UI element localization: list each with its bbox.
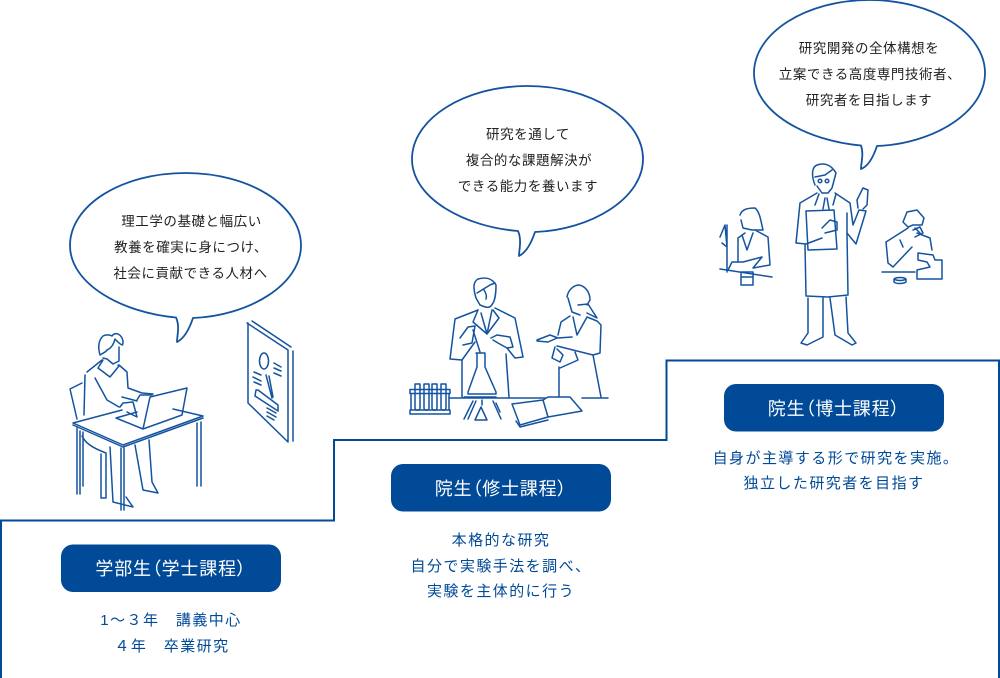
- description: doctoral: [713, 450, 959, 492]
- illustration: researcher at microscope: [882, 210, 942, 284]
- label: doctoral: [724, 384, 944, 432]
- speech bubble: undergraduate: 理工学の基礎と幅広い: [121, 213, 262, 229]
- speech bubble: doctoral: [754, 0, 985, 169]
- description: master's: 本格的な研究: [452, 532, 550, 549]
- illustration: head researcher with clipboard: [796, 164, 868, 345]
- label: master's: [391, 464, 611, 512]
- illustration: two researchers in lab: [449, 278, 608, 427]
- illustration: poster on wall: [247, 321, 293, 442]
- description: master's: 自分で実験手法を調べ、: [411, 558, 591, 575]
- illustration: test tube rack: [410, 384, 450, 414]
- speech bubble: master's: 複合的な課題解決が: [466, 152, 592, 168]
- staircase outline: [1, 360, 999, 678]
- speech bubble: master's: できる能力を養います: [458, 178, 598, 194]
- label: undergraduate: 学部生（学士課程）: [95, 559, 247, 579]
- label: undergraduate: [61, 544, 281, 592]
- speech bubble: doctoral: 立案できる高度専門技術者、: [779, 66, 961, 82]
- label: doctoral: 院生（博士課程）: [768, 399, 900, 419]
- speech bubble: master's: [412, 86, 643, 256]
- speech bubble: undergraduate: 教養を確実に身につけ、: [114, 239, 268, 255]
- description: doctoral: 自身が主導する形で研究を実施。: [713, 450, 959, 467]
- description: master's: 実験を主体的に行う: [427, 583, 575, 600]
- description: undergraduate: ４年 卒業研究: [114, 638, 230, 655]
- speech bubble: doctoral: 研究者を目指します: [806, 92, 932, 108]
- speech bubble: undergraduate: [70, 173, 301, 342]
- label: master's: 院生（修士課程）: [435, 479, 567, 499]
- speech bubble: doctoral: 研究開発の全体構想を: [799, 40, 939, 56]
- illustration: female researcher with pipette: [720, 208, 772, 285]
- description: undergraduate: 1～３年 講義中心: [100, 612, 242, 629]
- speech bubble: undergraduate: 社会に貢献できる人材へ: [113, 266, 268, 281]
- speech bubble: master's: 研究を通して: [486, 126, 570, 142]
- description: undergraduate: [100, 612, 242, 655]
- description: master's: [411, 532, 591, 600]
- description: doctoral: 独立した研究者を目指す: [744, 475, 924, 492]
- illustration: student at laptop: [70, 334, 203, 510]
